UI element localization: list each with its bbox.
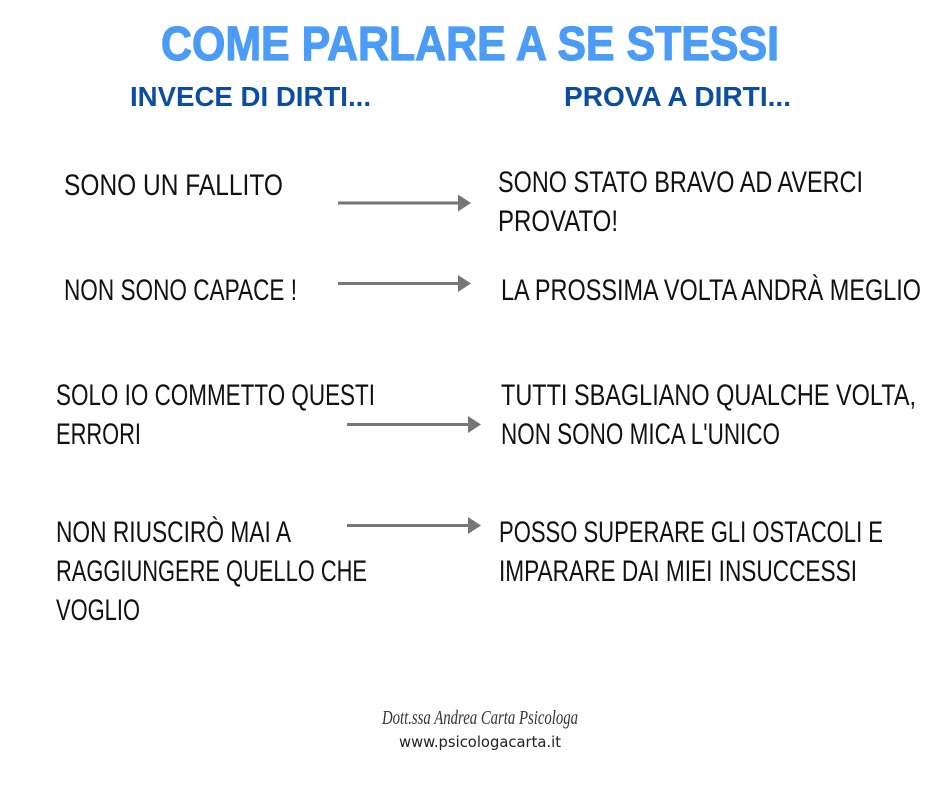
row 3 arrow (347, 416, 481, 433)
heading: left column: INVECE DI DIRTI... (130, 81, 371, 112)
row 4 left text: NON RIUSCIRÒ MAI A (56, 516, 291, 549)
row 4 arrow (347, 517, 481, 534)
row 2 left text: NON SONO CAPACE ! (64, 274, 297, 307)
row 3 right text (501, 379, 916, 451)
row 3 left text: ERRORI (56, 418, 141, 451)
row 4 left text (56, 516, 367, 627)
row 1 arrow (338, 194, 471, 212)
row 4 right text (499, 516, 883, 588)
row 1 right text: PROVATO! (498, 205, 618, 238)
row 3 right text: NON SONO MICA L'UNICO (501, 418, 780, 451)
row 3 left text: SOLO IO COMMETTO QUESTI (56, 379, 375, 412)
row 1 right text (498, 166, 863, 238)
row 3 left text (56, 379, 375, 451)
row 4 left text: VOGLIO (56, 594, 140, 627)
heading: right column: PROVA A DIRTI... (564, 81, 791, 112)
author signature: Dott.ssa Andrea Carta Psicologa (381, 707, 578, 729)
title: COME PARLARE A SE STESSI (161, 18, 779, 71)
website: www.psicologacarta.it (399, 733, 561, 751)
row 4 left text: RAGGIUNGERE QUELLO CHE (56, 555, 367, 588)
row 1 left text: SONO UN FALLITO (64, 169, 283, 202)
row 2 arrow (338, 275, 471, 292)
